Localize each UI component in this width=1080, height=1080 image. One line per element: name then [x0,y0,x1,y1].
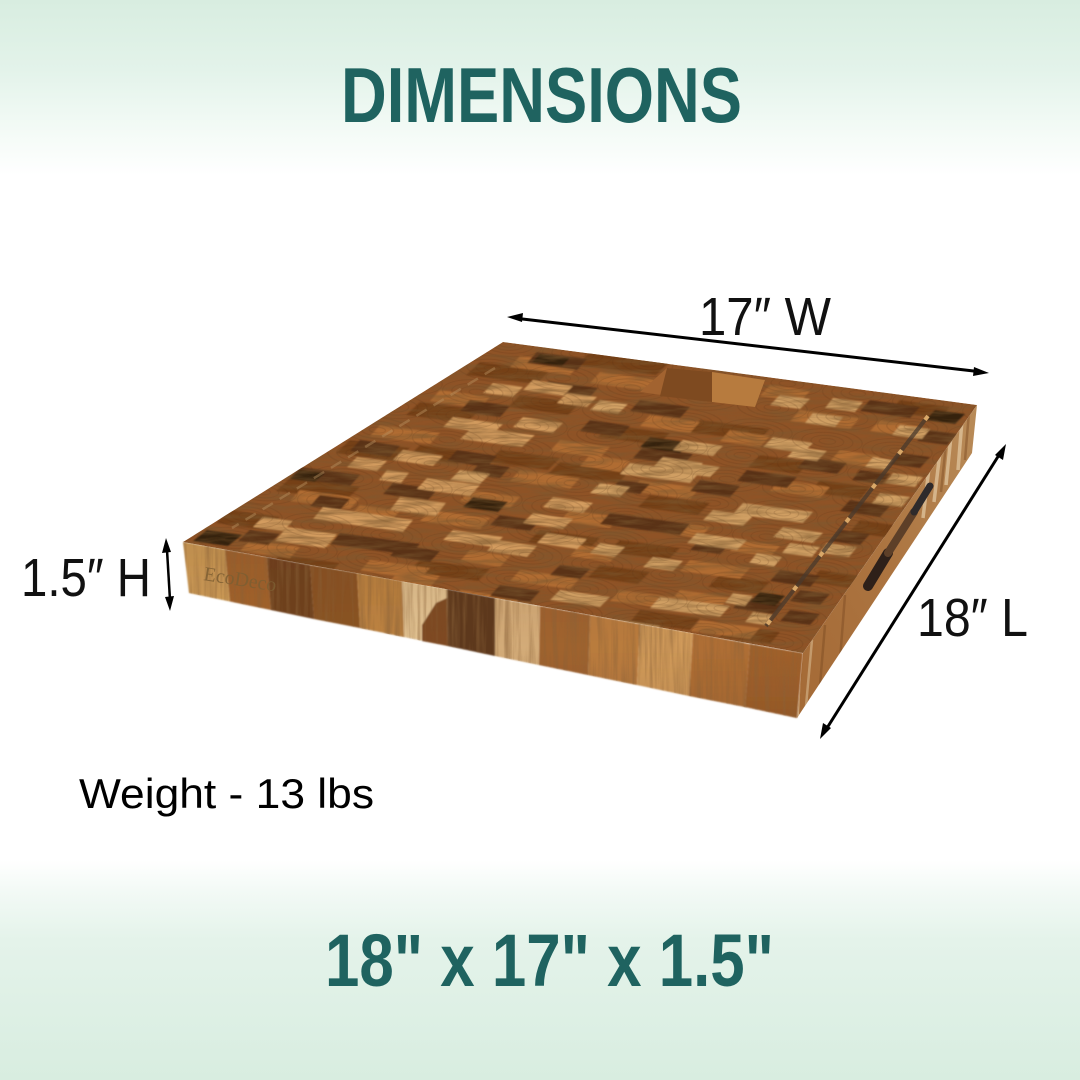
arrow: height [162,538,174,611]
dark end-grain blocks [238,352,957,625]
very dark blocks [193,354,965,606]
engraved logo: EcoDeco [202,563,278,596]
pale end-grain blocks [253,380,597,557]
left juice groove [232,368,495,528]
mid tone end-grain blocks [240,356,920,640]
weight note: Weight - 13 lbs [79,770,374,817]
cutting board [183,342,977,720]
end-grain ring pattern [183,342,977,653]
arrow: length [820,444,1006,739]
overall size heading: 18" x 17" x 1.5" [325,919,774,1002]
arrow: width [507,313,989,376]
label: height: 1.5″ H [21,548,151,608]
label: length: 18″ L [917,588,1028,648]
right juice groove [766,416,928,626]
wood grain texture [183,342,977,653]
handle recess [640,368,765,407]
board right side face [797,405,977,720]
board top surface [183,342,977,653]
broad dark patches [216,352,950,644]
side handle slot [868,486,930,586]
title: DIMENSIONS [341,51,742,139]
board front face planks [183,542,803,718]
label: width: 17″ W [699,287,831,347]
